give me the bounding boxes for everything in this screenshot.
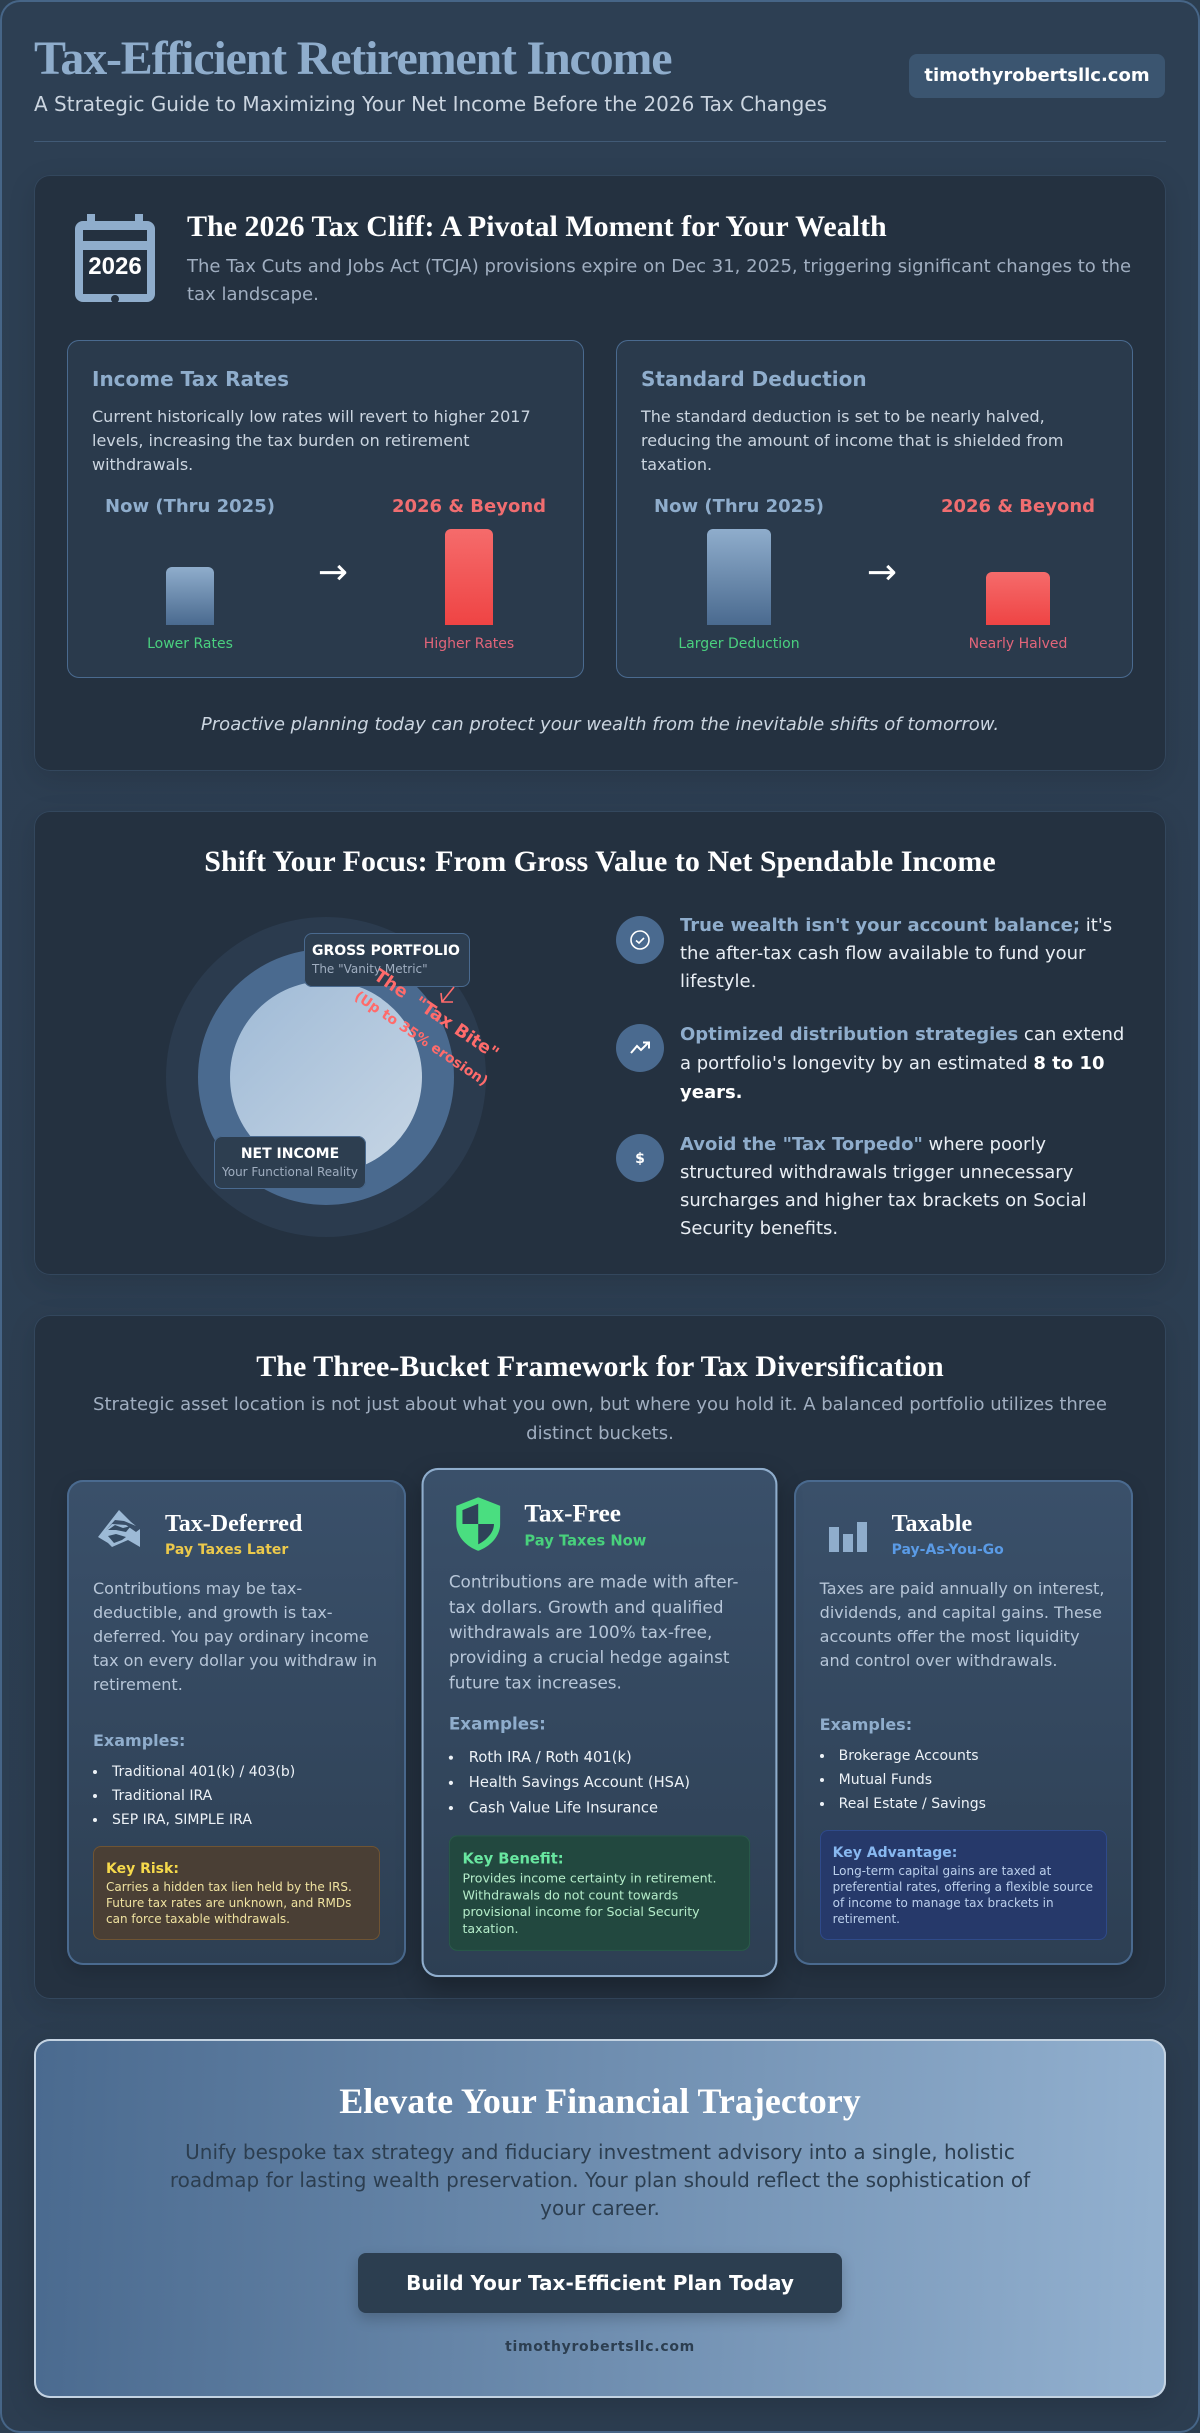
bullet 2 [616, 1024, 1124, 1103]
cta heading: Elevate Your Financial Trajectory [339, 2081, 861, 2121]
net label [214, 1136, 366, 1189]
bar: higher rates [445, 529, 493, 625]
bullet text: the after-tax cash flow available to fund your [680, 943, 1085, 964]
tier description [820, 1579, 1104, 1670]
examples list [820, 1748, 986, 1812]
icon: dollar [616, 1134, 664, 1182]
bar: lower rates [166, 567, 214, 625]
callout title: Key Advantage: [833, 1845, 957, 1861]
outer ring [166, 917, 486, 1237]
card: taxable [794, 1480, 1133, 1965]
now column [105, 496, 275, 652]
bar: larger deduction [707, 529, 771, 625]
intro text [186, 256, 1131, 305]
examples list: SEP IRA, SIMPLE IRA [112, 1812, 252, 1828]
panel: three-bucket framework [34, 1315, 1166, 1999]
card body: reducing the amount of income that is shielded from [641, 431, 1063, 450]
cta website: timothyrobertsllc.com [505, 2339, 695, 2355]
icon: check circle [616, 916, 664, 964]
card body: levels, increasing the tax burden on retirement [92, 431, 470, 450]
tier description: and control over withdrawals. [820, 1651, 1057, 1670]
bullet text: True wealth isn't your account balance; it's [680, 915, 1112, 936]
icon: bar chart [829, 1522, 867, 1552]
examples heading: Examples: [820, 1715, 912, 1734]
title: Tax-Efficient Retirement Income [34, 32, 671, 85]
cta button [358, 2253, 842, 2313]
callout text [462, 1871, 717, 1936]
bullet text: Security benefits. [680, 1218, 838, 1239]
2026 column [392, 496, 546, 652]
callout text: Provides income certainty in retirement. [463, 1871, 717, 1886]
callout: key advantage [820, 1830, 1107, 1940]
card heading: Standard Deduction [641, 367, 867, 391]
card: income tax rates [67, 340, 584, 678]
gross ring [198, 949, 454, 1205]
examples list: Roth IRA / Roth 401(k) [469, 1749, 632, 1766]
callout text: of income to manage tax brackets in [833, 1896, 1054, 1910]
intro text: The Tax Cuts and Jobs Act (TCJA) provisions expire on Dec 31, 2025, triggering significant changes to the [187, 256, 1131, 277]
callout text: provisional income for Social Security [463, 1905, 700, 1919]
2026 label: 2026 & Beyond [941, 496, 1095, 517]
bullet text: surcharges and higher tax brackets on Social [680, 1190, 1087, 1211]
net circle [230, 981, 422, 1173]
heading: The Three-Bucket Framework for Tax Diversification [256, 1350, 944, 1383]
tier description: retirement. [93, 1675, 183, 1694]
card: standard deduction [616, 340, 1133, 678]
gross label [304, 933, 470, 987]
callout text [833, 1864, 1093, 1926]
card body: The standard deduction is set to be nearly halved, [641, 407, 1045, 426]
intro text: Strategic asset location is not just about what you own, but where you hold it. A balanced portfolio utilizes three [93, 1394, 1107, 1415]
tier tagline: Pay Taxes Later [165, 1542, 288, 1558]
bullet text: Avoid the "Tax Torpedo" where poorly [680, 1134, 1046, 1155]
callout text: Long-term capital gains are taxed at [833, 1864, 1051, 1878]
intro text [93, 1394, 1107, 1444]
examples list: Traditional IRA [112, 1788, 212, 1804]
cta text: Unify bespoke tax strategy and fiduciary investment advisory into a single, holistic [185, 2140, 1015, 2164]
examples list: Mutual Funds [839, 1772, 932, 1788]
callout: key benefit [449, 1835, 750, 1951]
tax bite caption: (Up to 35% erosion) [351, 988, 491, 1090]
callout: key risk [93, 1846, 380, 1940]
heading: The 2026 Tax Cliff: A Pivotal Moment for Your Wealth [187, 210, 887, 243]
tier description: deductible, and growth is tax- [93, 1603, 333, 1622]
2026 column [941, 496, 1095, 652]
callout text: Carries a hidden tax lien held by the IRS. [106, 1880, 352, 1894]
tier description: Contributions may be tax- [93, 1579, 302, 1598]
card body: withdrawals. [92, 455, 193, 474]
examples heading: Examples: [93, 1731, 185, 1750]
card body [92, 407, 531, 474]
card body: taxation. [641, 455, 712, 474]
tier description: future tax increases. [449, 1673, 622, 1693]
tier description: tax on every dollar you withdraw in [93, 1651, 377, 1670]
tax bite callout: The "Tax Bite" [370, 966, 502, 1064]
tier tagline: Pay Taxes Now [525, 1533, 647, 1550]
tier description [449, 1572, 739, 1693]
heading: Shift Your Focus: From Gross Value to Net Spendable Income [204, 845, 996, 878]
icon: trend arrow [616, 1024, 664, 1072]
icon: tax-deferred [98, 1510, 140, 1547]
callout title: Key Risk: [106, 1861, 179, 1877]
tier title: Tax-Free [525, 1500, 621, 1528]
arrow: → [867, 552, 897, 593]
arrow: → [318, 552, 348, 593]
examples list: Cash Value Life Insurance [469, 1800, 658, 1816]
callout text: retirement. [833, 1912, 900, 1926]
tier description [93, 1579, 377, 1694]
tier description: withdrawals are 100% tax-free, [449, 1622, 713, 1642]
tier tagline: Pay-As-You-Go [892, 1542, 1004, 1558]
examples list: Brokerage Accounts [839, 1748, 979, 1764]
callout title: Key Benefit: [463, 1851, 564, 1868]
callout text: Future tax rates are unknown, and RMDs [106, 1896, 351, 1910]
bullet 3 [616, 1134, 1087, 1239]
header [34, 32, 1165, 116]
examples list [93, 1764, 295, 1828]
callout text: taxation. [463, 1921, 519, 1936]
net title: NET INCOME [241, 1146, 339, 1162]
bullet list [616, 915, 1124, 1239]
card heading: Income Tax Rates [92, 367, 289, 391]
intro text: distinct buckets. [526, 1423, 674, 1444]
bullet text [680, 1024, 1124, 1103]
tier description: Contributions are made with after- [449, 1572, 739, 1592]
bar label: Higher Rates [424, 636, 514, 652]
diagram: concentric circles [166, 917, 502, 1237]
2026 label: 2026 & Beyond [392, 496, 546, 517]
gross caption: The "Vanity Metric" [312, 962, 428, 976]
cta button: Build Your Tax-Efficient Plan Today [406, 2271, 794, 2295]
examples list: Real Estate / Savings [839, 1796, 986, 1812]
tier description: providing a crucial hedge against [449, 1647, 730, 1667]
bullet text: years. [680, 1082, 743, 1103]
callout text: preferential rates, offering a flexible source [833, 1880, 1093, 1894]
bar: nearly halved [986, 572, 1050, 625]
arrow: tax bite [440, 986, 454, 1003]
bar label: Larger Deduction [678, 636, 800, 652]
intro text: tax landscape. [187, 284, 319, 305]
bullet text [680, 915, 1112, 992]
callout text: can force taxable withdrawals. [106, 1912, 290, 1926]
now label: Now (Thru 2025) [105, 496, 275, 517]
panel: the 2026 tax cliff [34, 175, 1166, 771]
bullet 1 [616, 915, 1112, 992]
examples heading: Examples: [449, 1714, 546, 1734]
tier description: Taxes are paid annually on interest, [820, 1579, 1104, 1598]
panel: gross to net [34, 811, 1166, 1275]
net caption: Your Functional Reality [222, 1165, 358, 1179]
bar label: Lower Rates [147, 636, 233, 652]
bullet text: lifestyle. [680, 971, 756, 992]
tier description: dividends, and capital gains. These [820, 1603, 1102, 1622]
website badge [909, 54, 1165, 98]
gross title: GROSS PORTFOLIO [312, 943, 460, 959]
bullet text [680, 1134, 1087, 1239]
tier description: tax dollars. Growth and qualified [449, 1597, 724, 1617]
examples list: Health Savings Account (HSA) [469, 1774, 690, 1791]
closing statement: Proactive planning today can protect your wealth from the inevitable shifts of tomorrow. [201, 714, 999, 735]
bar label: Nearly Halved [969, 636, 1067, 652]
card: tax-free [422, 1468, 778, 1977]
callout text: Withdrawals do not count towards [463, 1888, 679, 1903]
icon: shield [456, 1497, 500, 1551]
now label: Now (Thru 2025) [654, 496, 824, 517]
bullet text: structured withdrawals trigger unnecessary [680, 1162, 1073, 1183]
examples list: Traditional 401(k) / 403(b) [112, 1764, 295, 1780]
cta text: your career. [540, 2196, 660, 2220]
panel: call to action [34, 2039, 1166, 2398]
card: tax-deferred [67, 1480, 406, 1965]
tier description: deferred. You pay ordinary income [93, 1627, 369, 1646]
card body: Current historically low rates will revert to higher 2017 [92, 407, 531, 426]
now column [654, 496, 824, 652]
tier title: Taxable [892, 1511, 972, 1537]
subtitle: A Strategic Guide to Maximizing Your Net Income Before the 2026 Tax Changes [34, 92, 827, 116]
examples list [448, 1749, 690, 1816]
cta text: roadmap for lasting wealth preservation. Your plan should reflect the sophistication of [170, 2168, 1030, 2192]
cta text [170, 2140, 1031, 2220]
icon: dollar: $ [635, 1151, 645, 1167]
tier description: accounts offer the most liquidity [820, 1627, 1080, 1646]
website badge: timothyrobertsllc.com [924, 65, 1150, 86]
callout text [106, 1880, 352, 1926]
icon: calendar 2026: 2026 [88, 253, 142, 280]
bullet text: a portfolio's longevity by an estimated 8 to 10 [680, 1053, 1104, 1074]
bullet text: Optimized distribution strategies can extend [680, 1024, 1124, 1045]
card body [640, 407, 1063, 474]
icon: calendar 2026 [75, 214, 155, 302]
tier title: Tax-Deferred [165, 1511, 302, 1537]
